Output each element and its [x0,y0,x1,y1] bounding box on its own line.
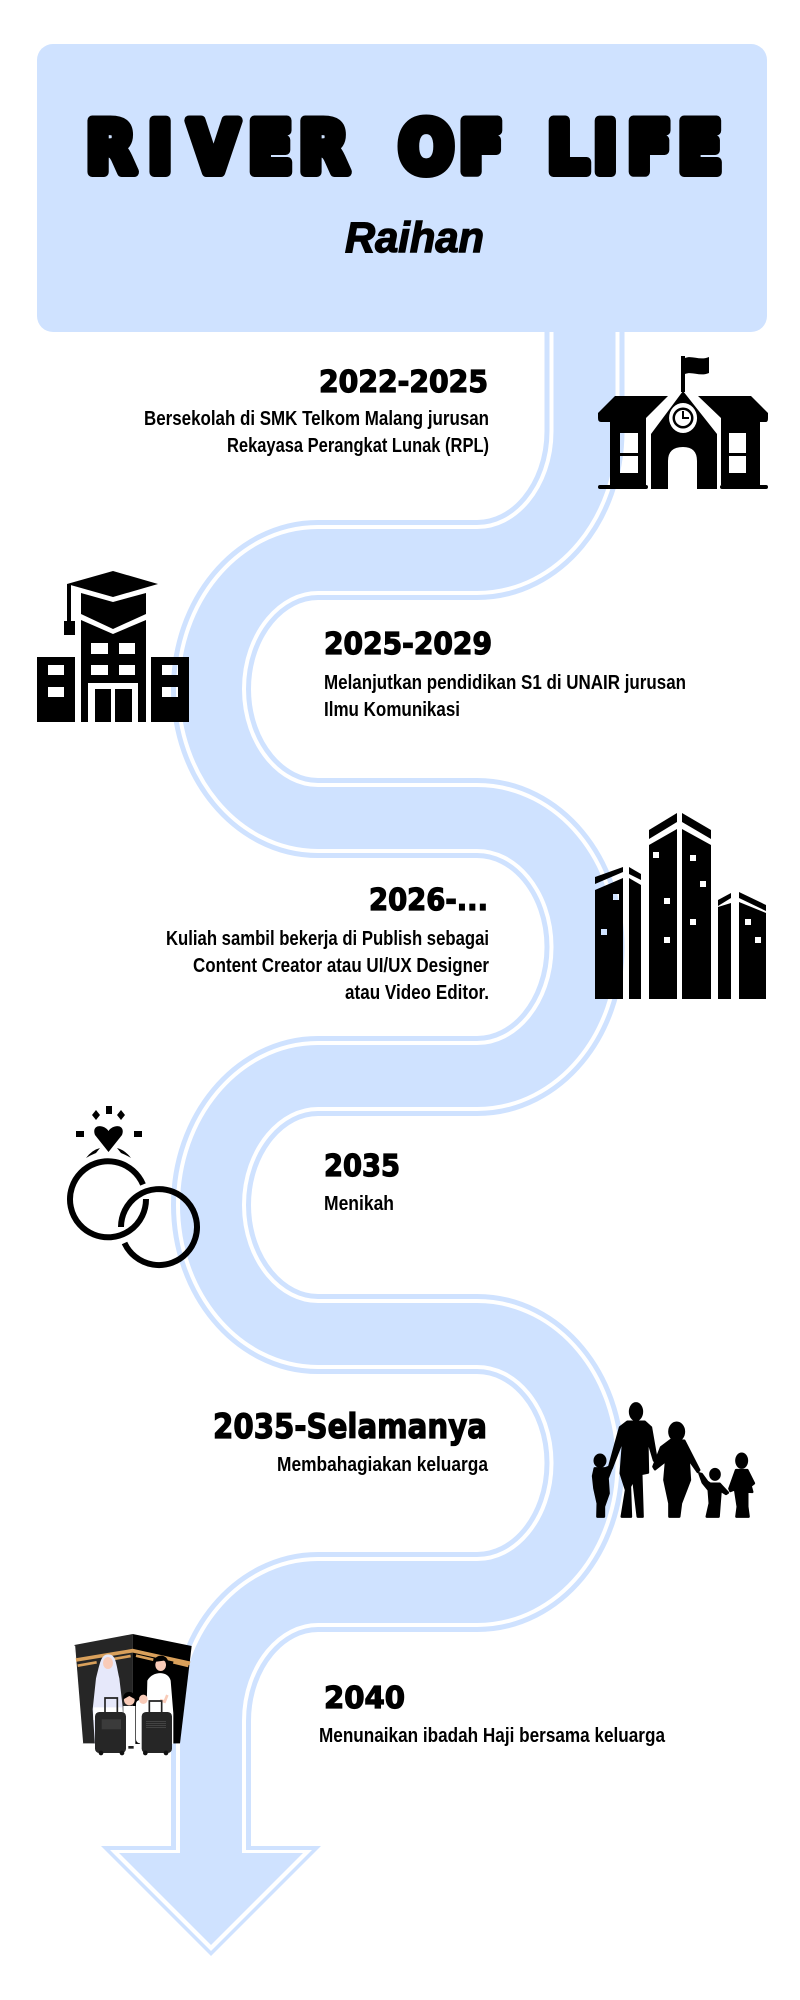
icon: city buildings [595,813,766,999]
milestone 2035: 2035 [324,1149,400,1184]
milestone 2035-Selamanya: 2035-Selamanya [213,1407,487,1447]
milestone 2022-2025: 2022-2025 [319,365,488,400]
milestone 2026: Content Creator atau UI/UX Designer [193,955,489,977]
milestone 2025-2029: 2025-2029 [324,627,492,662]
milestone 2035-Selamanya [213,1407,489,1476]
milestone 2040 [319,1681,666,1747]
icon: school [598,356,768,489]
milestone 2022-2025 [144,365,489,457]
title: RIVER OF LIFE [86,107,722,189]
milestone 2025-2029 [324,627,686,721]
icon: hajj family at Kaaba [74,1634,192,1755]
milestone 2026: 2026-... [369,883,488,918]
milestone 2040: Menunaikan ibadah Haji bersama keluarga [319,1725,666,1747]
milestone 2035-Selamanya: Membahagiakan keluarga [277,1454,489,1476]
milestone 2026: atau Video Editor. [345,982,489,1004]
milestone 2026 [166,883,489,1004]
milestone 2025-2029: Ilmu Komunikasi [324,699,460,721]
milestone 2026: Kuliah sambil bekerja di Publish sebagai [166,928,489,950]
header panel [37,44,767,332]
milestone 2022-2025: Rekayasa Perangkat Lunak (RPL) [227,435,489,457]
icon: family silhouette [593,1403,754,1517]
milestone 2035: Menikah [324,1193,394,1215]
icon: wedding rings [70,1106,197,1265]
subtitle: Raihan [345,214,484,262]
milestone 2025-2029: Melanjutkan pendidikan S1 di UNAIR jurusan [324,672,686,694]
milestone 2022-2025: Bersekolah di SMK Telkom Malang jurusan [144,408,489,430]
river arrow [101,320,584,1956]
milestone 2035 [324,1149,400,1215]
milestone 2040: 2040 [324,1681,405,1716]
icon: graduation building [37,571,189,722]
